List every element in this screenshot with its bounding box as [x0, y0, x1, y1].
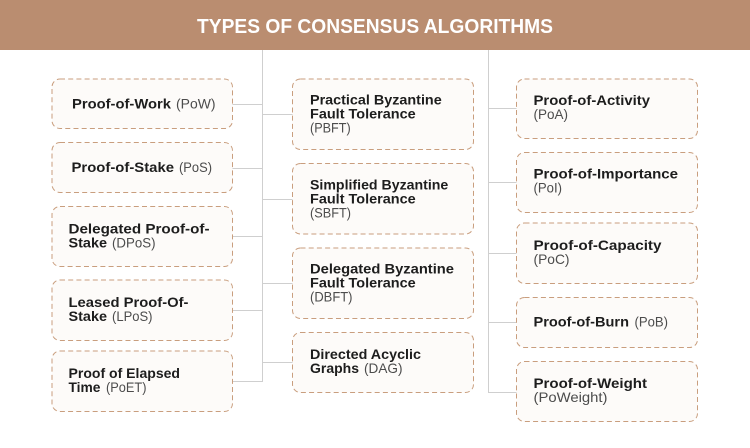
card: Proof of Elapsed Time	[52, 351, 232, 412]
card: Delegated Byzantine Fault Tolerance: Delegated Byzantine	[310, 260, 454, 276]
card: Proof-of-Burn	[516, 298, 698, 348]
card: Proof-of-Burn: Proof-of-Burn	[534, 314, 629, 330]
card: Proof-of-Stake: Proof-of-Stake	[72, 159, 174, 175]
card: Practical Byzantine Fault Tolerance	[292, 79, 474, 150]
card: Directed Acyclic Graphs: Graphs	[310, 360, 359, 376]
card: Leased Proof-Of-Stake	[52, 280, 232, 340]
card: Proof-of-Importance: (PoI)	[534, 180, 562, 196]
card: Proof-of-Importance	[516, 152, 698, 212]
card: Proof-of-Stake: (PoS)	[179, 159, 212, 175]
card: Proof of Elapsed Time: (PoET)	[106, 379, 146, 395]
card: Proof-of-Stake	[52, 142, 232, 192]
card: Proof-of-Activity	[516, 79, 698, 138]
card: Proof-of-Capacity: (PoC)	[534, 251, 570, 267]
card: Leased Proof-Of-Stake: (LPoS)	[112, 308, 152, 324]
card: Proof-of-Work	[52, 79, 232, 128]
card: Proof of Elapsed Time: Proof of Elapsed	[68, 365, 180, 381]
card: Proof-of-Activity: Proof-of-Activity	[534, 92, 650, 108]
card: Simplified Byzantine Fault Tolerance	[292, 164, 474, 234]
card: Delegated Proof-of-Stake: (DPoS)	[112, 234, 156, 250]
card: Directed Acyclic Graphs: (DAG)	[364, 360, 402, 376]
card: Proof-of-Weight: Proof-of-Weight	[534, 375, 647, 391]
card: Proof-of-Work: Proof-of-Work	[72, 95, 171, 111]
title banner: TYPES OF CONSENSUS ALGORITHMS	[197, 16, 553, 38]
card: Delegated Byzantine Fault Tolerance: (DBFT)	[310, 288, 352, 304]
card: Delegated Proof-of-Stake	[52, 206, 232, 266]
card: Proof-of-Capacity: Proof-of-Capacity	[534, 237, 662, 253]
card: Proof of Elapsed Time: Time	[68, 379, 101, 395]
card: Proof-of-Burn: (PoB)	[634, 314, 668, 330]
card: Proof-of-Weight: (PoWeight)	[534, 389, 608, 405]
card: Delegated Byzantine Fault Tolerance: Fault Tolerance	[310, 274, 416, 290]
title banner	[0, 0, 750, 50]
card: Simplified Byzantine Fault Tolerance: Simplified Byzantine	[310, 176, 449, 192]
card: Simplified Byzantine Fault Tolerance: Fault Tolerance	[310, 190, 416, 206]
card: Delegated Proof-of-Stake: Stake	[68, 234, 107, 250]
card: Proof-of-Activity: (PoA)	[534, 106, 568, 122]
connector lines	[232, 50, 516, 392]
card: Proof-of-Capacity	[516, 223, 698, 284]
card: Leased Proof-Of-Stake: Stake	[68, 308, 107, 324]
card: Practical Byzantine Fault Tolerance: Fault Tolerance	[310, 106, 416, 122]
card: Proof-of-Work: (PoW)	[176, 95, 216, 111]
card: Practical Byzantine Fault Tolerance: (PBFT)	[310, 120, 351, 136]
card: Directed Acyclic Graphs: Directed Acyclic	[310, 346, 421, 362]
card: Delegated Byzantine Fault Tolerance	[292, 248, 474, 318]
card: Directed Acyclic Graphs	[292, 332, 474, 392]
card: Proof-of-Importance: Proof-of-Importance	[534, 166, 678, 182]
card: Proof-of-Weight	[516, 362, 698, 422]
card: Leased Proof-Of-Stake: Leased Proof-Of-	[68, 294, 189, 310]
card: Delegated Proof-of-Stake: Delegated Proof-of-	[68, 220, 210, 236]
card: Practical Byzantine Fault Tolerance: Practical Byzantine	[310, 92, 442, 108]
card: Simplified Byzantine Fault Tolerance: (SBFT)	[310, 204, 351, 220]
